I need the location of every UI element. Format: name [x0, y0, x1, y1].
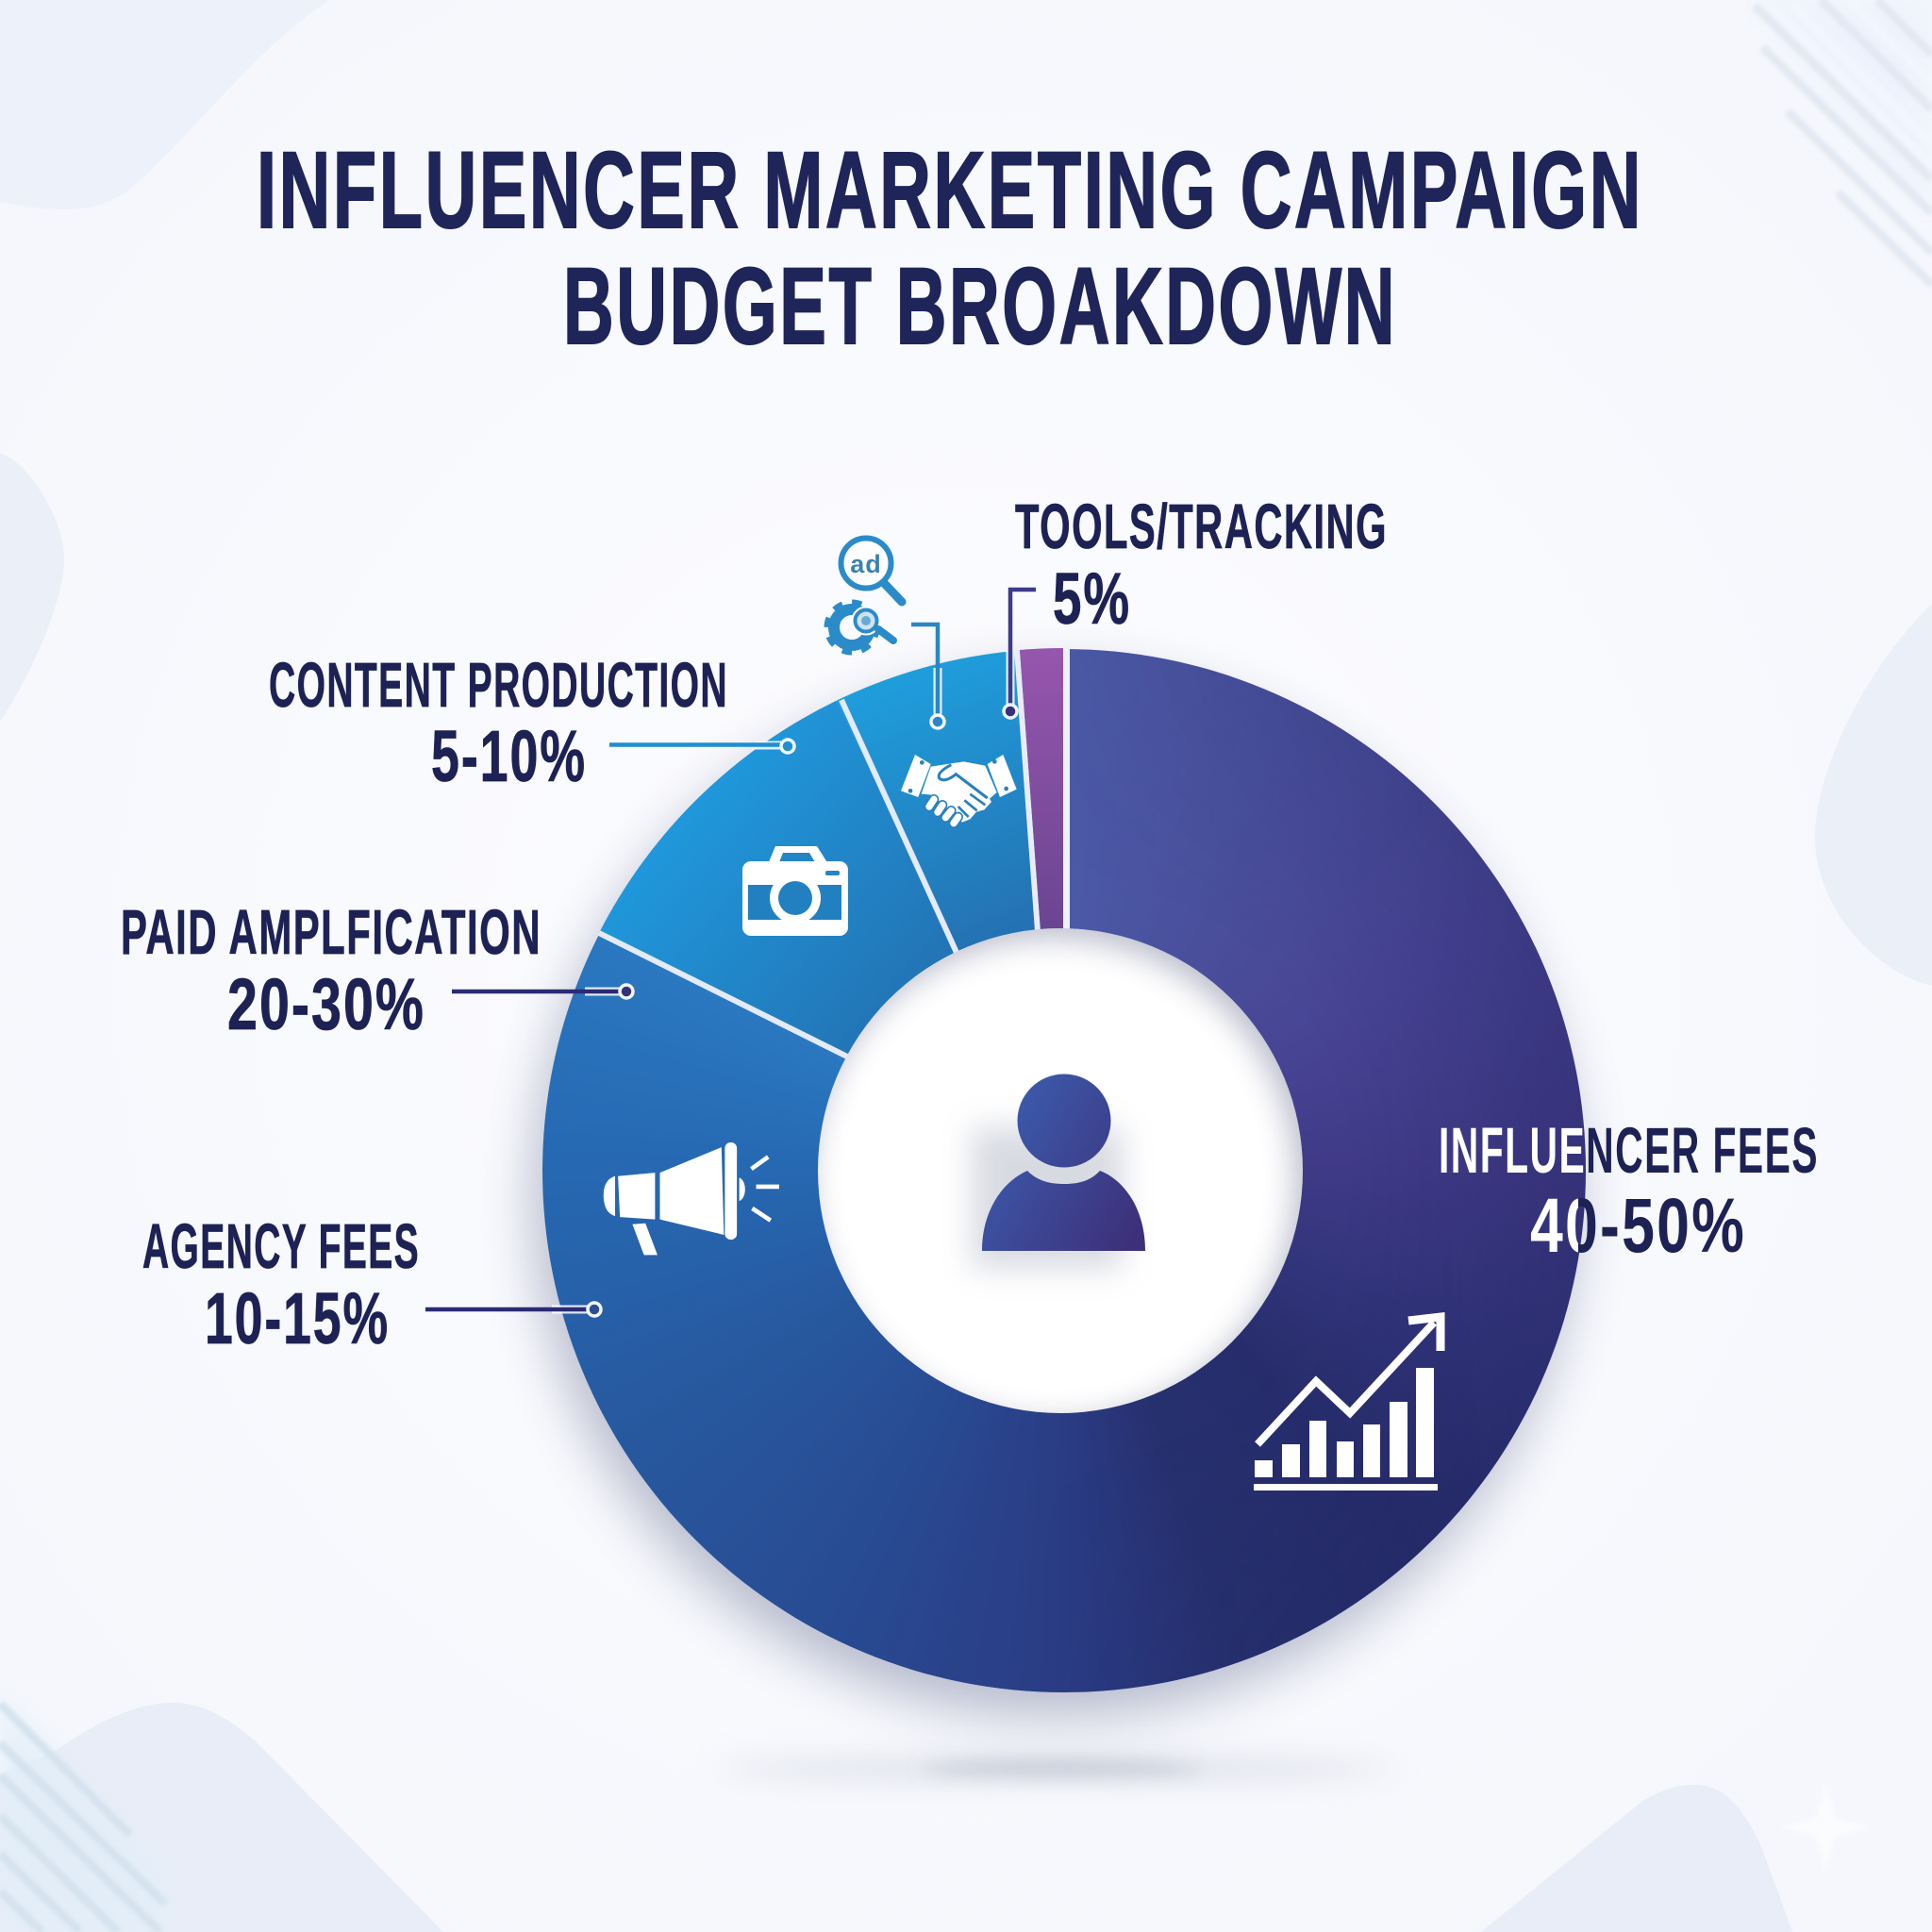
label: content production: CONTENT PRODUCTION: [269, 650, 728, 721]
label: paid amplification: PAID AMPLFICATION: [121, 897, 541, 968]
floor shadow: [717, 1757, 1396, 1780]
donut chart: [506, 645, 1604, 1745]
slice: content production: [599, 701, 965, 1067]
label: agency fees: [142, 1211, 420, 1359]
slice: tools purple: [1020, 648, 1063, 943]
divider: content production and handshake: [841, 700, 958, 955]
label: agency fees: 10-15%: [205, 1278, 390, 1359]
label: paid amplification: 20-30%: [227, 964, 425, 1045]
gap between blue and purple slices: [1014, 650, 1041, 943]
divider: paid amplification and content production: [599, 933, 851, 1058]
icon: magnifier with ad: [841, 538, 902, 602]
label: influencer fees: 40-50%: [1530, 1183, 1746, 1269]
leader: tools tracking: [1004, 590, 1036, 718]
leader: content production: [609, 740, 794, 753]
icon: growth chart: [1254, 1317, 1441, 1491]
label: influencer fees: [1439, 1114, 1819, 1269]
title: BUDGET BROAKDOWN: [563, 246, 1397, 367]
icon: magnifier with ad: ad: [850, 550, 882, 578]
label: tools/tracking: 5%: [1053, 558, 1131, 640]
icon: person: [972, 1074, 1145, 1269]
leader: agency fees: [425, 1303, 601, 1316]
label: tools/tracking: TOOLS/TRACKING: [1015, 491, 1388, 562]
icon: gear with magnifier: [826, 602, 893, 653]
icon: handshake: [901, 755, 1017, 824]
influencer fees edge shading: [1221, 674, 1586, 1641]
label: content production: [269, 650, 728, 797]
gap at top of chart: [1063, 647, 1070, 943]
icon: megaphone: [604, 1142, 779, 1255]
label: tools/tracking: [1015, 491, 1388, 640]
label: content production: 5-10%: [431, 716, 587, 797]
leader: handshake segment: [911, 625, 944, 728]
icon: camera: [742, 846, 848, 936]
label: agency fees: AGENCY FEES: [142, 1211, 420, 1282]
leader: paid amplification: [452, 985, 633, 998]
slice: tools tracking handshake segment: [836, 651, 1036, 966]
label: paid amplification: [121, 897, 541, 1045]
